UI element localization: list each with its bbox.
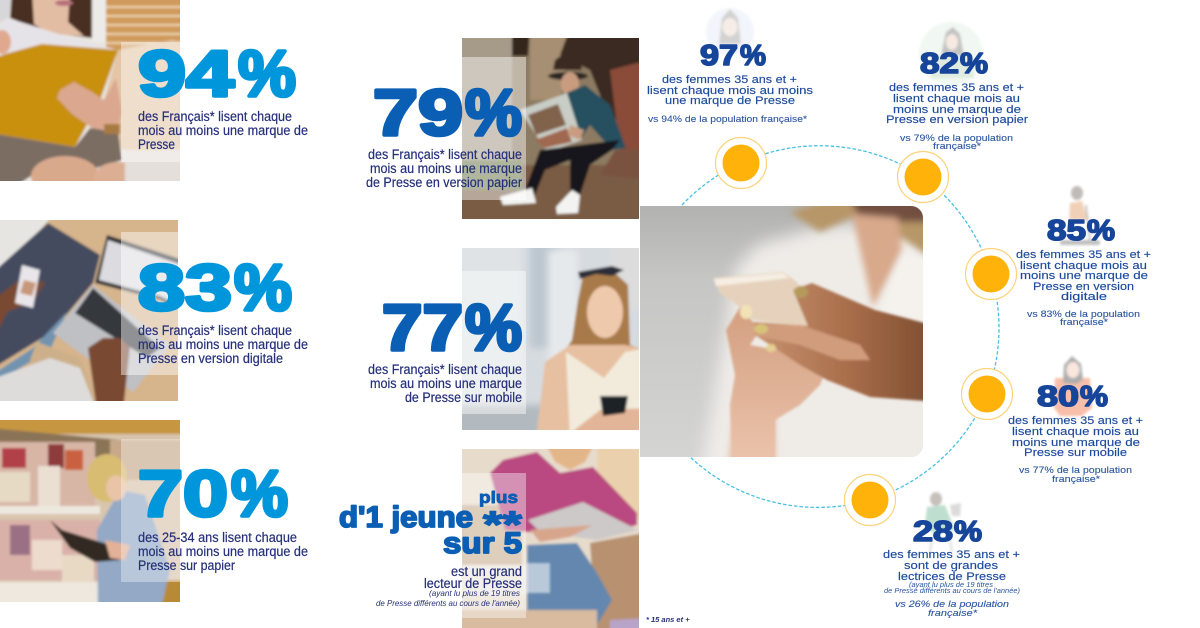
stat: 94% bbox=[138, 37, 308, 152]
stat: women 28%: (ayant lu plus de 19 titres bbox=[909, 582, 994, 589]
photo: smiling woman with phone bbox=[462, 248, 639, 430]
stat: women 82%: lisent chaque mois au bbox=[893, 93, 1020, 105]
footnote: * 15 ans et + bbox=[646, 615, 690, 624]
overlay panel bbox=[462, 57, 526, 200]
icon: woman portrait 80% bbox=[1054, 356, 1092, 416]
stat: 94%: mois au moins une marque de bbox=[138, 123, 308, 138]
stat: women 85%: française* bbox=[1060, 317, 1109, 327]
photo: laptop and phone bbox=[0, 220, 178, 401]
stat: women 28%: lectrices de Presse bbox=[898, 571, 1006, 583]
stat: 94%: Presse bbox=[138, 137, 175, 152]
stat: plus d'1 jeune sur 5: de Presse différents au cours de l'année) bbox=[376, 598, 520, 608]
stat: 77%: de Presse sur mobile bbox=[405, 390, 522, 405]
stat: women 80%: lisent chaque mois au bbox=[1012, 426, 1139, 438]
stat: 79%: 79 bbox=[373, 76, 463, 149]
stat: plus d'1 jeune sur 5: (ayant lu plus de 19 titres bbox=[429, 588, 521, 598]
stat: women 82%: des femmes 35 ans et + bbox=[889, 82, 1024, 94]
stat: women 97%: 97 bbox=[700, 40, 738, 72]
stat: 77%: 77 bbox=[382, 291, 463, 364]
stat: women 80%: moins une marque de bbox=[1012, 437, 1140, 449]
icon: woman portrait 97% bbox=[706, 8, 754, 56]
overlay panel bbox=[121, 232, 178, 375]
stat: 70%: mois au moins une marque de bbox=[138, 544, 308, 559]
stat: women 80%: des femmes 35 ans et + bbox=[1008, 415, 1143, 427]
icon: woman on scooter bbox=[1060, 186, 1100, 245]
stat: plus d'1 jeune sur 5 bbox=[339, 488, 523, 608]
stat: women 85%: Presse en version bbox=[1033, 281, 1134, 293]
stat: 94%: % bbox=[238, 37, 296, 110]
marker: 28% bbox=[844, 474, 896, 526]
stat: women 85%: moins une marque de bbox=[1020, 270, 1148, 282]
marker: 85% bbox=[966, 248, 1016, 300]
stat: women 82% bbox=[886, 48, 1028, 151]
photo: man reading a newspaper bbox=[462, 38, 639, 219]
stat: women 80%: Presse sur mobile bbox=[1024, 447, 1127, 459]
icon: woman portrait 82% bbox=[919, 22, 983, 86]
stat: 79%: mois au moins une marque bbox=[370, 161, 522, 176]
stat: plus d'1 jeune sur 5: d'1 jeune bbox=[339, 501, 473, 534]
stat: women 97%: vs 94% de la population française* bbox=[648, 114, 808, 124]
stat: 83%: Presse en version digitale bbox=[138, 351, 283, 366]
overlay panel bbox=[121, 42, 180, 162]
stat: 94%: 94 bbox=[138, 37, 234, 110]
dashed timeline arc bbox=[682, 146, 999, 507]
photo: woman reading on a sofa bbox=[462, 449, 639, 628]
stat: women 82%: française* bbox=[933, 141, 982, 151]
overlay light bbox=[526, 563, 550, 593]
photo: man at a newsstand bbox=[0, 420, 180, 602]
stat: 70%: 70 bbox=[138, 457, 228, 530]
marker: 97% bbox=[716, 138, 766, 188]
stat: women 97%: une marque de Presse bbox=[665, 95, 795, 107]
stat: women 28%: vs 26% de la population bbox=[895, 599, 1009, 609]
stat: 83%: des Français* lisent chaque bbox=[138, 323, 292, 338]
stat: plus d'1 jeune sur 5: plus bbox=[479, 488, 518, 507]
stat: 70%: % bbox=[231, 457, 288, 530]
stat: plus d'1 jeune sur 5: est un grand bbox=[451, 564, 522, 579]
stat: women 85%: vs 83% de la population bbox=[1027, 309, 1140, 319]
marker: 82% bbox=[898, 152, 948, 202]
stat: plus d'1 jeune sur 5: lecteur de Presse bbox=[424, 576, 522, 591]
photo: woman reading a magazine bbox=[0, 0, 180, 181]
stat: 94%: des Français* lisent chaque bbox=[138, 109, 292, 124]
stat: 77%: mois au moins une marque bbox=[370, 376, 522, 391]
stat: 83%: mois au moins une marque de bbox=[138, 337, 308, 352]
stat: women 28%: des femmes 35 ans et + bbox=[883, 549, 1020, 561]
stat: 79%: des Français* lisent chaque bbox=[368, 147, 522, 162]
overlay panel bbox=[462, 271, 526, 414]
stat: women 28%: française* bbox=[928, 608, 978, 618]
stat: women 28%: sont de grandes bbox=[904, 560, 999, 572]
stat: 70% bbox=[138, 457, 308, 573]
stat: women 80%: 80 bbox=[1037, 381, 1079, 413]
stat: 79%: % bbox=[465, 76, 522, 149]
stat: women 97%: lisent chaque mois au moins bbox=[647, 85, 814, 97]
stat: women 80%: % bbox=[1080, 381, 1108, 413]
photo: hands holding a smartphone bbox=[640, 206, 923, 457]
stat: women 85% bbox=[1016, 215, 1151, 327]
stat: 70%: des 25-34 ans lisent chaque bbox=[138, 530, 297, 545]
stat: women 85%: des femmes 35 ans et + bbox=[1016, 249, 1151, 261]
overlay panel bbox=[121, 439, 180, 582]
stat: women 80% bbox=[1008, 381, 1143, 484]
stat: 79% bbox=[366, 76, 522, 190]
stat: women 85%: % bbox=[1087, 215, 1115, 247]
stat: 70%: Presse sur papier bbox=[138, 558, 235, 573]
stat: plus d'1 jeune sur 5: ** bbox=[483, 504, 523, 545]
stat: women 85%: 85 bbox=[1047, 215, 1086, 247]
stat: women 97% bbox=[647, 40, 814, 124]
stat: women 80%: française* bbox=[1052, 474, 1101, 484]
stat: women 97%: % bbox=[740, 40, 766, 72]
stat: women 82%: % bbox=[960, 48, 988, 80]
stat: 83%: 83 bbox=[138, 251, 232, 324]
overlay panel bbox=[462, 473, 526, 618]
stat: 83%: % bbox=[234, 251, 292, 324]
stat: plus d'1 jeune sur 5: sur 5 bbox=[443, 527, 522, 560]
stat: 77%: des Français* lisent chaque bbox=[368, 362, 522, 377]
stat: women 28%: % bbox=[954, 516, 982, 548]
stat: women 28% bbox=[883, 516, 1020, 618]
stat: women 85%: lisent chaque mois au bbox=[1020, 260, 1147, 272]
stat: women 82%: moins une marque de bbox=[893, 104, 1021, 116]
stat: women 82%: 82 bbox=[920, 48, 959, 80]
stat: women 28%: de Presse différents au cours de l'année) bbox=[884, 588, 1020, 595]
stat: 83% bbox=[138, 251, 308, 366]
stat: women 85%: digitale bbox=[1061, 291, 1107, 303]
stat: women 97%: des femmes 35 ans et + bbox=[662, 74, 797, 86]
stat: women 80%: vs 77% de la population bbox=[1019, 465, 1132, 475]
stat: women 82%: Presse en version papier bbox=[886, 114, 1028, 126]
stat: women 28%: 28 bbox=[913, 516, 953, 548]
marker: 80% bbox=[962, 368, 1012, 420]
stat: 77%: % bbox=[465, 291, 522, 364]
stat: women 82%: vs 79% de la population bbox=[900, 133, 1013, 143]
stat: 77% bbox=[368, 291, 522, 405]
stat: 79%: de Presse en version papier bbox=[366, 175, 522, 190]
icon: woman reading in armchair bbox=[925, 492, 961, 552]
